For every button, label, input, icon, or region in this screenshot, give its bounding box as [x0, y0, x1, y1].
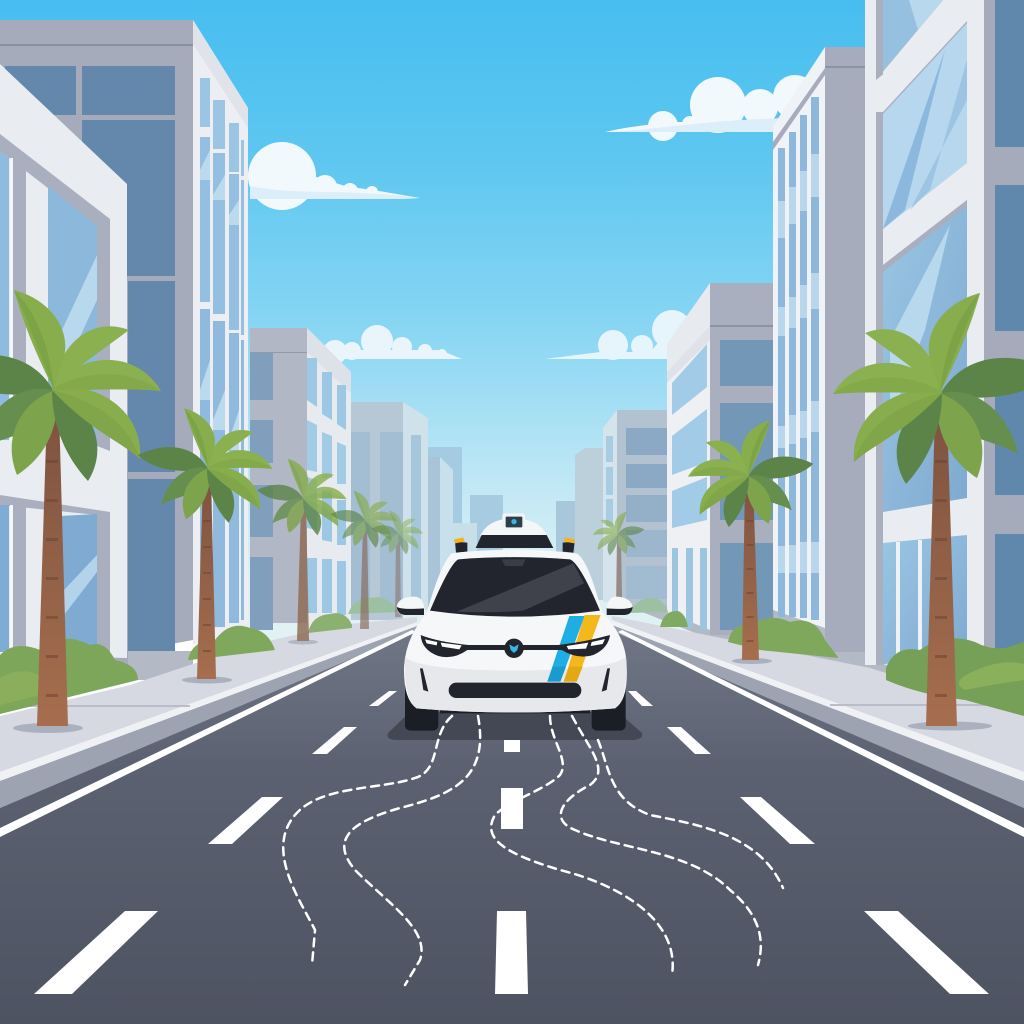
cloud: small right	[545, 310, 692, 360]
bush: left far	[308, 613, 352, 633]
car body	[404, 550, 627, 712]
bush: right mid	[728, 618, 838, 658]
planned route dashed paths	[283, 716, 783, 985]
windshield	[430, 557, 600, 617]
bush: left mid	[188, 626, 275, 660]
building: right near white	[865, 0, 1024, 665]
front badge	[504, 639, 524, 658]
car shadow	[387, 712, 642, 740]
building: center right mid	[603, 410, 668, 605]
palm: left far	[257, 459, 347, 644]
side sensors	[454, 537, 575, 553]
cloud: upper right	[605, 75, 817, 141]
bush: center right	[628, 598, 668, 613]
distant buildings: left	[350, 402, 503, 620]
palm: right mid	[688, 420, 813, 664]
building: right mid	[667, 283, 774, 635]
bush: center left	[348, 597, 398, 614]
car tires	[405, 673, 626, 731]
mirrors	[397, 597, 633, 615]
rear-view mirror	[502, 559, 525, 566]
bush: right far	[660, 611, 688, 627]
sky background	[0, 0, 1024, 640]
building: right tall grey	[773, 47, 865, 652]
sidewalk: left	[0, 617, 417, 808]
lower grille	[449, 683, 581, 698]
building: far left mid	[250, 328, 351, 630]
body lower shade	[405, 657, 626, 712]
road edge line: right	[618, 630, 1024, 837]
headlights and grille band	[421, 635, 610, 657]
palm: right near	[833, 293, 1024, 730]
racing stripes	[547, 615, 601, 682]
headlight lamps	[425, 639, 605, 649]
palm: distant right	[593, 511, 644, 597]
building: left tall blue	[0, 20, 248, 680]
palm: distant left 1	[330, 491, 398, 629]
road edge line: left	[0, 630, 416, 837]
road	[0, 631, 1024, 1024]
palm: distant left 2	[372, 510, 423, 617]
cloud: upper left	[248, 142, 420, 210]
ground behind right sidewalk	[612, 600, 1024, 716]
palm: left near	[0, 290, 161, 733]
distant buildings: right	[556, 448, 604, 600]
windshield reflections	[457, 563, 584, 612]
roof sensor dome	[476, 513, 553, 548]
bush: left near	[0, 639, 138, 714]
building: left near white	[0, 64, 127, 658]
sidewalk: right	[612, 616, 1024, 808]
autonomous car	[397, 513, 633, 731]
lower vents	[420, 668, 610, 692]
bush: right near	[886, 638, 1024, 716]
palm: left mid	[138, 408, 272, 684]
cloud: small left	[323, 325, 462, 364]
lane markings	[34, 691, 989, 994]
